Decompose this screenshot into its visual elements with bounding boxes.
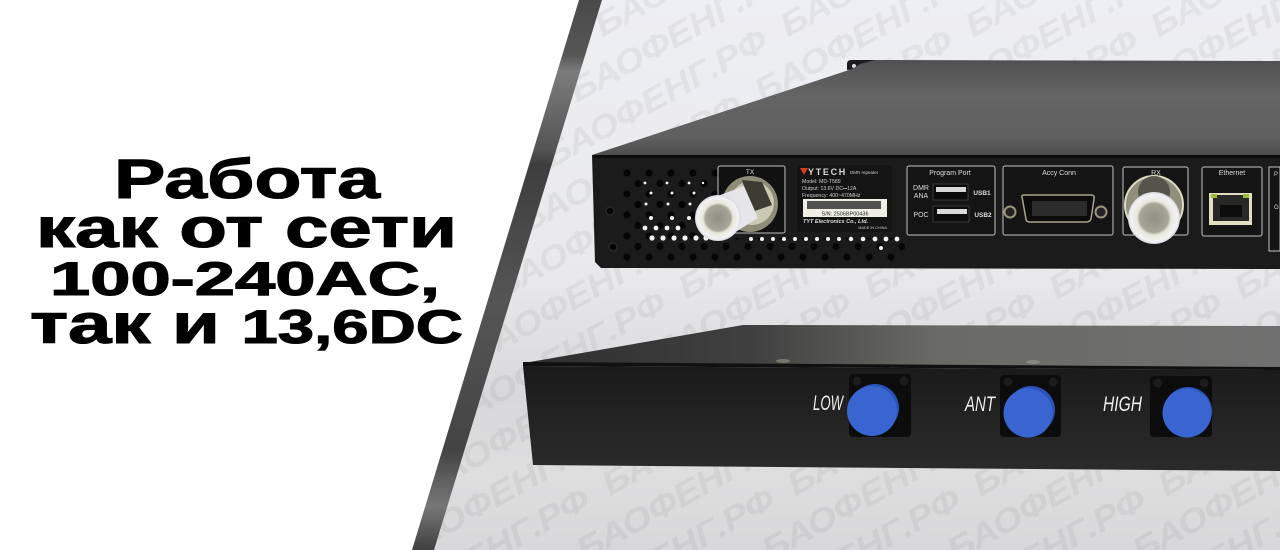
Program Port panel: DMR <box>913 185 929 192</box>
Program Port panel <box>907 166 995 235</box>
photo background panel <box>434 0 1280 550</box>
cropped power panel: G <box>1274 205 1279 211</box>
Program Port panel: USB1 <box>973 190 991 197</box>
top face <box>592 60 1280 156</box>
TX port panel: TX <box>746 169 755 176</box>
device: upper repeater rear view <box>592 60 1280 269</box>
model label: Model: MD-T589 <box>802 179 841 185</box>
Program Port panel: Program Port <box>929 170 971 177</box>
model label: Frequency: 400~470MHz <box>802 193 861 199</box>
screw holes <box>606 207 614 215</box>
title <box>30 147 463 355</box>
Accy Conn panel: Accy Conn <box>1042 170 1076 177</box>
title: 100-240AC, <box>50 252 440 305</box>
vent holes <box>622 168 905 262</box>
Accy Conn panel <box>1003 166 1113 235</box>
Program Port panel: ANA <box>914 193 929 200</box>
Program Port panel: USB2 <box>974 212 992 219</box>
model label: MADE IN CHINA <box>858 226 887 230</box>
model label: Output: 13.6V DC⎓12A <box>802 186 857 192</box>
device: lower unit with RF ports <box>523 325 1280 471</box>
LOW port: LOW <box>813 392 844 415</box>
model label: TYT Electronics Co., Ltd. <box>803 219 869 225</box>
HIGH port: HIGH <box>1103 393 1143 416</box>
front face <box>592 155 1280 269</box>
RX port panel: RX <box>1151 170 1161 177</box>
model label: DMR repeater <box>850 170 879 175</box>
watermark pattern <box>434 0 1280 550</box>
Ethernet port panel: Ethernet <box>1219 170 1245 177</box>
diagonal dark strip <box>412 0 602 550</box>
HIGH port <box>1103 376 1212 438</box>
cropped power panel <box>1269 167 1280 251</box>
title: так и 13,6DC <box>30 292 463 355</box>
Ethernet port panel <box>1202 167 1262 236</box>
LOW port <box>813 374 911 437</box>
cropped power panel: P <box>1274 172 1278 178</box>
model label: YTECH <box>808 167 847 177</box>
Program Port panel: POC <box>913 212 929 219</box>
front face <box>523 366 1280 471</box>
top mounting bracket <box>847 60 880 70</box>
model label: S/N: 2506BP00436 <box>821 212 869 218</box>
TX port panel <box>695 166 785 241</box>
title: как от сети <box>36 196 457 259</box>
top face <box>524 325 1280 370</box>
ANT port: ANT <box>964 393 997 416</box>
title: Работа <box>114 147 381 210</box>
RX port panel <box>1123 167 1188 244</box>
model label <box>797 165 892 232</box>
ANT port <box>964 375 1061 438</box>
USB ports <box>933 184 968 200</box>
top screws <box>776 359 790 363</box>
